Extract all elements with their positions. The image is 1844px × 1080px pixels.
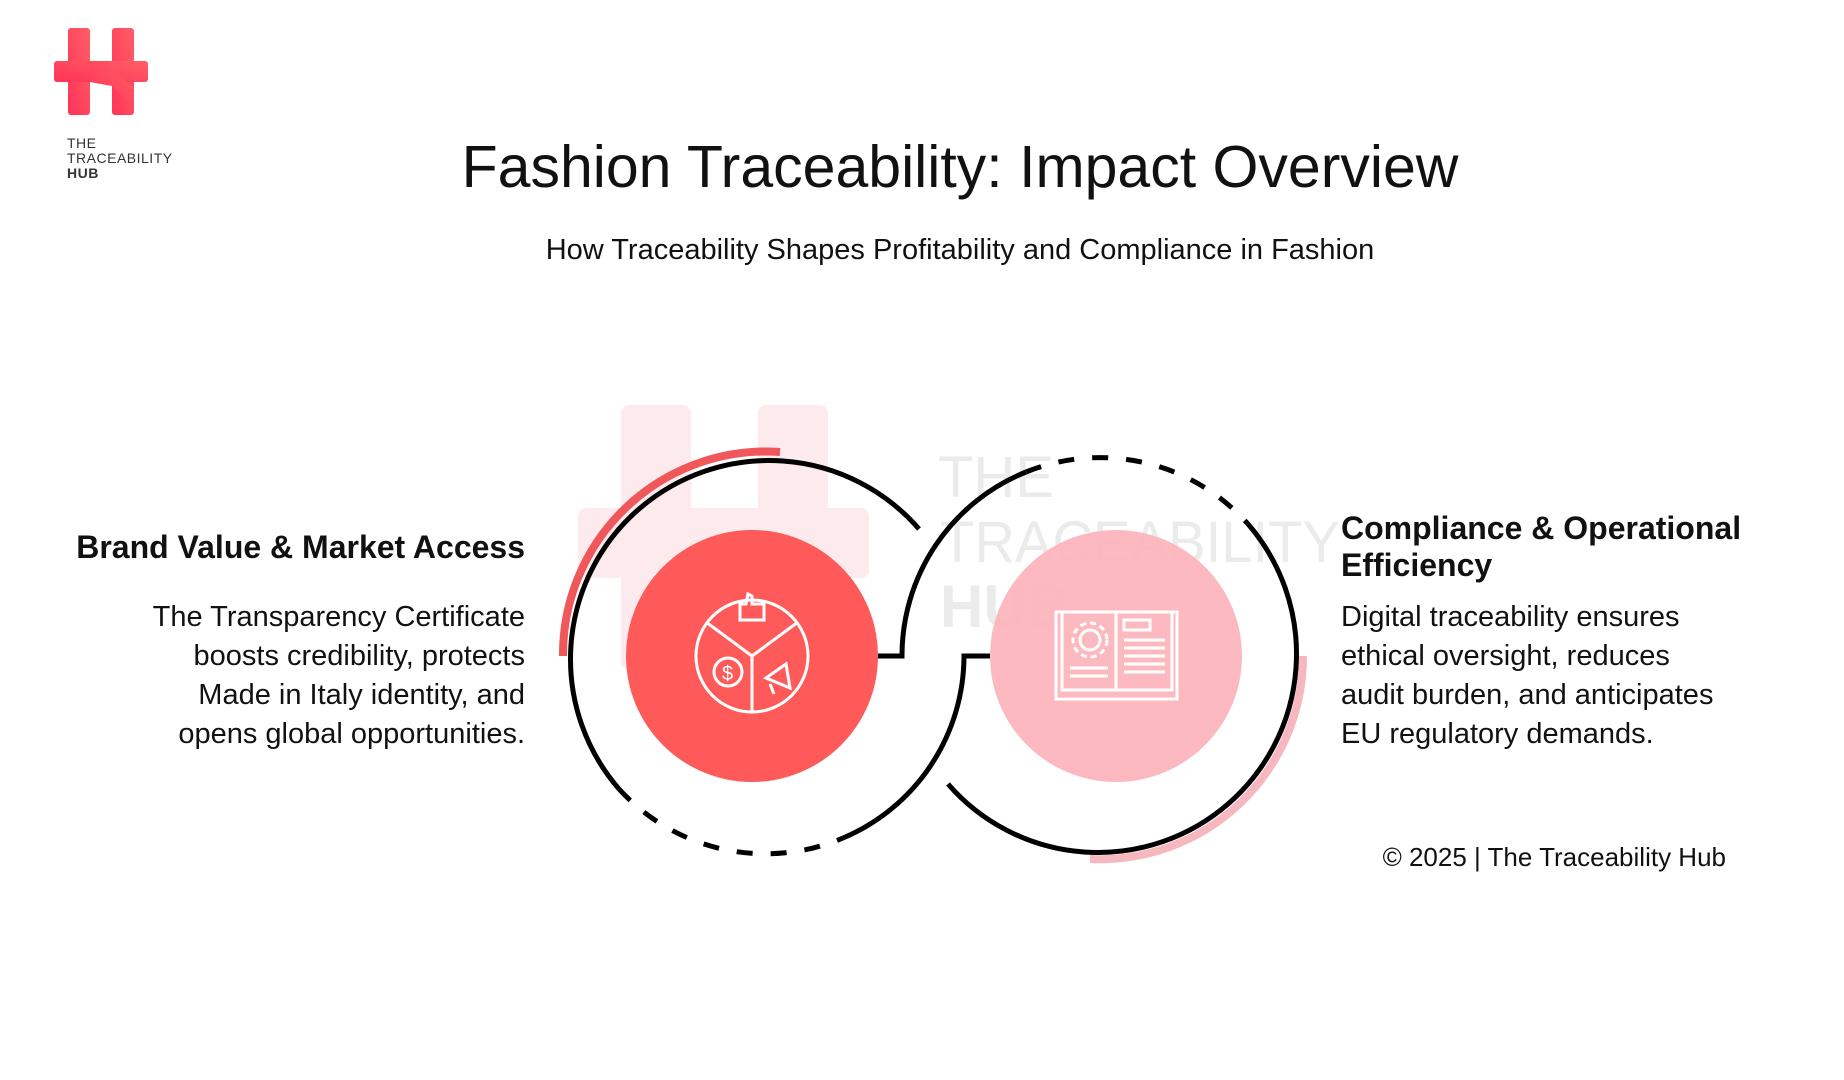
watermark logo [578, 405, 869, 670]
right circle [990, 530, 1242, 782]
logo: TRACEABILITY [67, 150, 173, 166]
watermark text: TRACEABILITY [940, 510, 1340, 575]
right body: EU regulatory demands. [1341, 718, 1654, 750]
red accent arc [563, 452, 780, 656]
left body: Made in Italy identity, and [198, 679, 525, 711]
right body [1341, 601, 1713, 750]
logo: THE [67, 135, 96, 151]
icon: brand value [696, 594, 808, 712]
right body: ethical oversight, reduces [1341, 640, 1670, 672]
right heading: Efficiency [1341, 547, 1492, 583]
title: Fashion Traceability: Impact Overview [462, 134, 1458, 200]
watermark text [938, 445, 1340, 640]
right body: audit burden, and anticipates [1341, 679, 1713, 711]
pink accent arc [1090, 656, 1303, 859]
right heading: Compliance & Operational [1341, 510, 1741, 546]
left body: boosts credibility, protects [194, 640, 525, 672]
left ring [571, 461, 990, 854]
right ring [878, 458, 1296, 852]
icon: book [1056, 612, 1177, 699]
logo: HUB [67, 165, 99, 181]
right body: Digital traceability ensures [1341, 601, 1679, 633]
left body [153, 601, 525, 750]
left heading: Brand Value & Market Access [76, 529, 525, 565]
subtitle: How Traceability Shapes Profitability and Compliance in Fashion [546, 234, 1374, 266]
left body: opens global opportunities. [178, 718, 525, 750]
watermark text: HUB [940, 573, 1070, 640]
footer: © 2025 | The Traceability Hub [1383, 842, 1726, 872]
watermark text: THE [938, 445, 1054, 510]
icon: brand value: $ [722, 663, 733, 685]
left body: The Transparency Certificate [153, 601, 525, 633]
logo [54, 28, 173, 181]
left circle [626, 530, 878, 782]
right heading [1341, 510, 1741, 583]
